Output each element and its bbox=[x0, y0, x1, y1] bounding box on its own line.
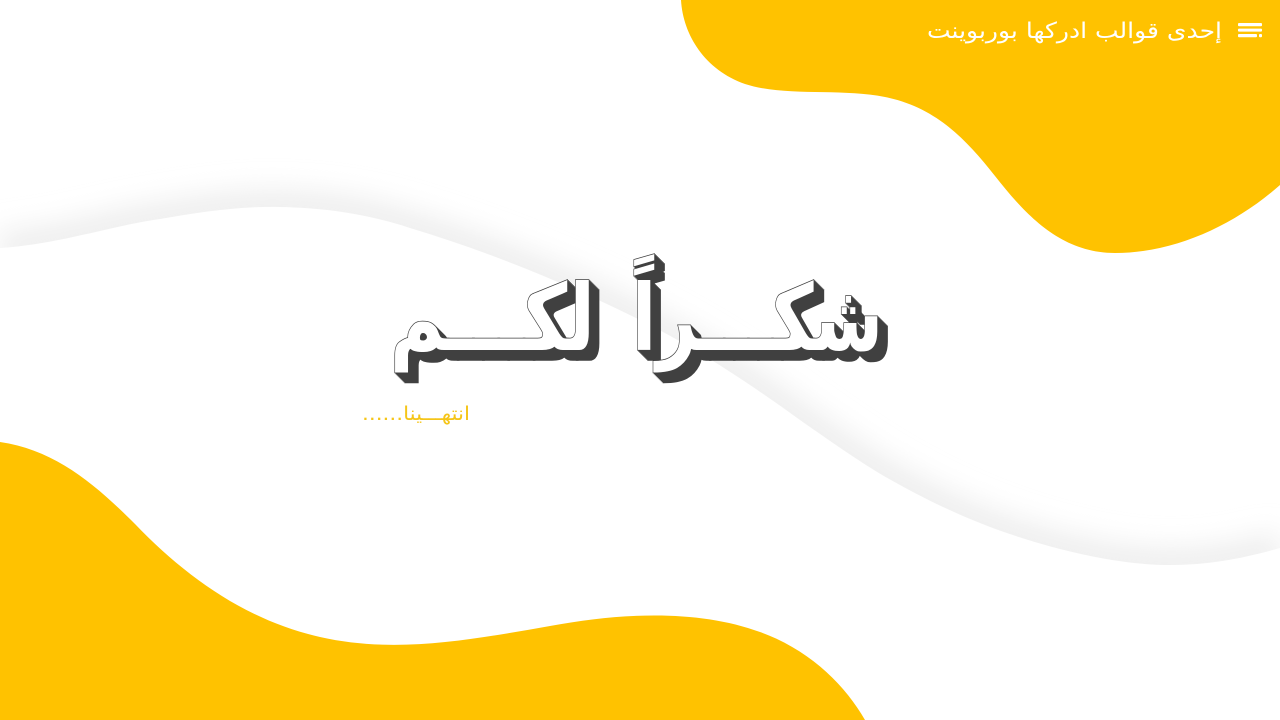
top-right yellow blob bbox=[681, 0, 1280, 253]
soft grey wave shadow bbox=[0, 207, 1280, 565]
icon: menu lines bbox=[1238, 23, 1262, 37]
bottom-left yellow blob bbox=[0, 442, 865, 720]
main title bbox=[390, 254, 883, 373]
title word: to you: لكـــم bbox=[390, 265, 595, 373]
subtitle: انتهـــينا...... bbox=[362, 403, 470, 425]
title word: thanks: شكـــراً bbox=[632, 254, 883, 373]
header label bbox=[927, 19, 1262, 44]
header text: إحدى قوالب ادركها بوربوينت bbox=[927, 19, 1222, 44]
